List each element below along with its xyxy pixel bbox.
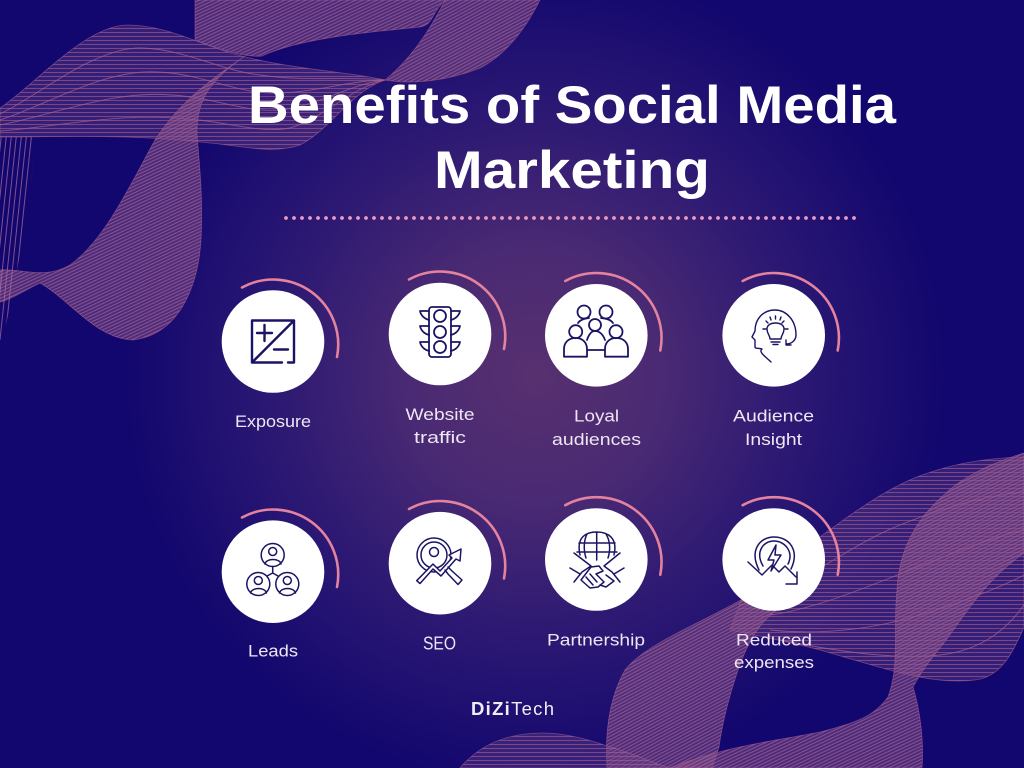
- icon: globe and handshake: [570, 532, 624, 588]
- icon: head with light bulb: [752, 310, 796, 362]
- item: Website traffic: [389, 272, 505, 447]
- brand: DiZiTech: DiZiTech: [471, 698, 554, 719]
- label: SEO: SEO: [423, 634, 456, 654]
- icon: exposure plus minus: [252, 320, 294, 362]
- item: Reduced expenses: [722, 497, 839, 672]
- label: Website traffic: traffic: [414, 428, 467, 447]
- dotted divider: [286, 216, 856, 220]
- wave mesh: top left: [0, 0, 540, 340]
- item: Leads: [222, 510, 338, 660]
- item: SEO: [389, 501, 505, 654]
- icon: target with rising arrow: [417, 538, 462, 584]
- label: Reduced expenses: [734, 630, 814, 672]
- label: Partnership: Partnership: [547, 630, 645, 650]
- icon: connected people: [247, 544, 299, 596]
- item: Partnership: [545, 497, 662, 650]
- title: Marketing: [434, 141, 710, 200]
- item: Loyal audiences: [545, 273, 662, 449]
- item: Audience Insight: [722, 273, 839, 449]
- label: Reduced expenses: expenses: [734, 653, 814, 672]
- label: Audience Insight: Insight: [745, 430, 802, 449]
- title: Benefits of Social Media: [248, 76, 897, 135]
- label: Loyal audiences: Loyal: [574, 406, 619, 426]
- label: Leads: Leads: [248, 642, 298, 660]
- label: Reduced expenses: Reduced: [736, 630, 812, 650]
- item: Exposure: [222, 280, 338, 431]
- icon: traffic light: [420, 307, 460, 357]
- icon: falling cost arrow: [748, 537, 797, 584]
- label: Exposure: Exposure: [235, 412, 311, 431]
- title: [248, 76, 897, 200]
- label: Audience Insight: [733, 406, 814, 449]
- wave mesh: bottom right: [460, 453, 1024, 768]
- icon: audience group: [564, 306, 628, 357]
- label: Loyal audiences: audiences: [552, 430, 641, 449]
- label: Audience Insight: Audience: [733, 406, 814, 426]
- label: Website traffic: [406, 405, 474, 447]
- label: Website traffic: Website: [406, 405, 474, 424]
- label: Loyal audiences: [552, 406, 641, 449]
